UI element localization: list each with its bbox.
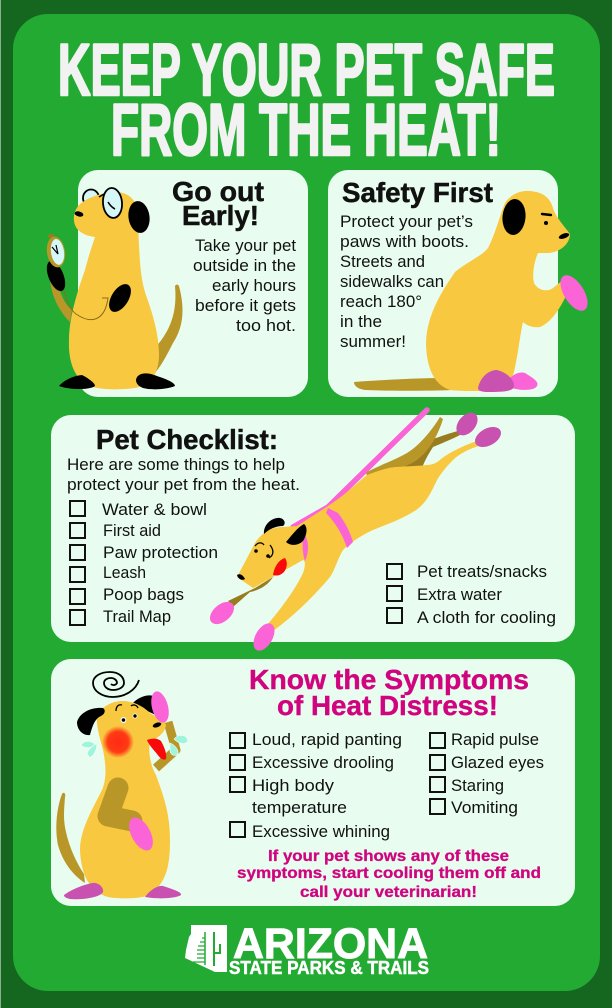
title	[58, 30, 555, 171]
heading: know the symptoms: of Heat Distress!	[277, 690, 498, 721]
text: protect paws: reach 180°	[340, 292, 422, 311]
checklist: left column: Poop bags	[103, 585, 184, 604]
callout: see your veterinarian	[237, 848, 541, 901]
text: checklist intro	[67, 455, 300, 494]
checklist: left column: Water & bowl	[102, 500, 207, 519]
checklist: left column: Leash	[103, 563, 146, 582]
checklist: left column: Paw protection	[103, 543, 218, 562]
text: checklist intro: Here are some things to help	[67, 455, 285, 474]
text: take your pet outside: outside in the	[193, 256, 296, 275]
checklist: symptoms left: Loud, rapid panting	[252, 730, 402, 749]
icon: arizona state with cactus	[185, 925, 227, 972]
checklist: symptoms right: Vomiting	[451, 798, 518, 817]
text: take your pet outside: early hours	[212, 276, 296, 295]
checklist: left column: First aid	[103, 521, 161, 540]
heading: go out early: Go out	[172, 176, 264, 207]
checklist: symptoms left: Excessive drooling	[252, 753, 394, 772]
illustration: running dog on leash	[206, 409, 504, 654]
text: protect paws: Streets and	[340, 252, 425, 271]
callout: see your veterinarian: symptoms, start cooling them off and	[237, 865, 541, 882]
heading: know the symptoms	[249, 664, 529, 721]
checklist: symptoms right: Staring	[451, 776, 504, 795]
text: checklist intro: protect your pet from the heat.	[67, 475, 300, 494]
illustration: dizzy overheated dog	[56, 672, 188, 899]
checklist: symptoms right: Rapid pulse	[451, 730, 539, 749]
checklist: symptoms left: Excessive whining	[252, 822, 390, 841]
illustration: dog with pocket watch	[43, 187, 183, 389]
text: take your pet outside: before it gets	[195, 296, 296, 315]
text: protect paws: sidewalks can	[340, 272, 444, 291]
text: take your pet outside	[193, 236, 296, 335]
panel: pet checklist	[51, 409, 575, 654]
logo: arizona state parks and trails	[185, 920, 429, 978]
panel: safety first	[328, 170, 593, 397]
checklist: symptoms left: temperature	[252, 798, 347, 817]
text: protect paws	[340, 212, 473, 351]
checklist: right column	[387, 562, 556, 627]
text: take your pet outside: too hot.	[236, 316, 296, 335]
logo: arizona state parks and trails: ARIZONA	[233, 920, 428, 968]
text: take your pet outside: Take your pet	[195, 236, 296, 255]
checklist: right column: A cloth for cooling	[417, 608, 556, 627]
text: protect paws: in the	[340, 312, 382, 331]
illustration: dog with boots	[354, 191, 593, 392]
text: protect paws: Protect your pet’s	[340, 212, 473, 231]
panel: go out early	[43, 170, 308, 397]
checklist: symptoms left	[230, 730, 402, 841]
heading: safety first: Safety First	[342, 177, 493, 208]
checklist: symptoms right: Glazed eyes	[451, 753, 544, 772]
logo: arizona state parks and trails: STATE PARKS & TRAILS	[229, 958, 429, 978]
panel: heat distress symptoms	[51, 659, 575, 906]
checklist: right column: Pet treats/snacks	[417, 562, 547, 581]
callout: see your veterinarian: call your veterinarian!	[300, 884, 477, 901]
heading: go out early	[172, 176, 264, 231]
checklist: left column: Trail Map	[103, 607, 171, 626]
heading: pet checklist: Pet Checklist:	[96, 424, 278, 455]
checklist: symptoms left: High body	[252, 776, 335, 795]
heading: go out early: Early!	[182, 200, 259, 231]
checklist: left column	[70, 500, 218, 626]
text: protect paws: paws with boots.	[340, 232, 469, 251]
text: protect paws: summer!	[340, 332, 406, 351]
callout: see your veterinarian: If your pet shows any of these	[268, 848, 509, 865]
checklist: right column: Extra water	[417, 585, 502, 604]
heading: know the symptoms: Know the Symptoms	[249, 664, 529, 695]
checklist: symptoms right	[430, 730, 544, 817]
